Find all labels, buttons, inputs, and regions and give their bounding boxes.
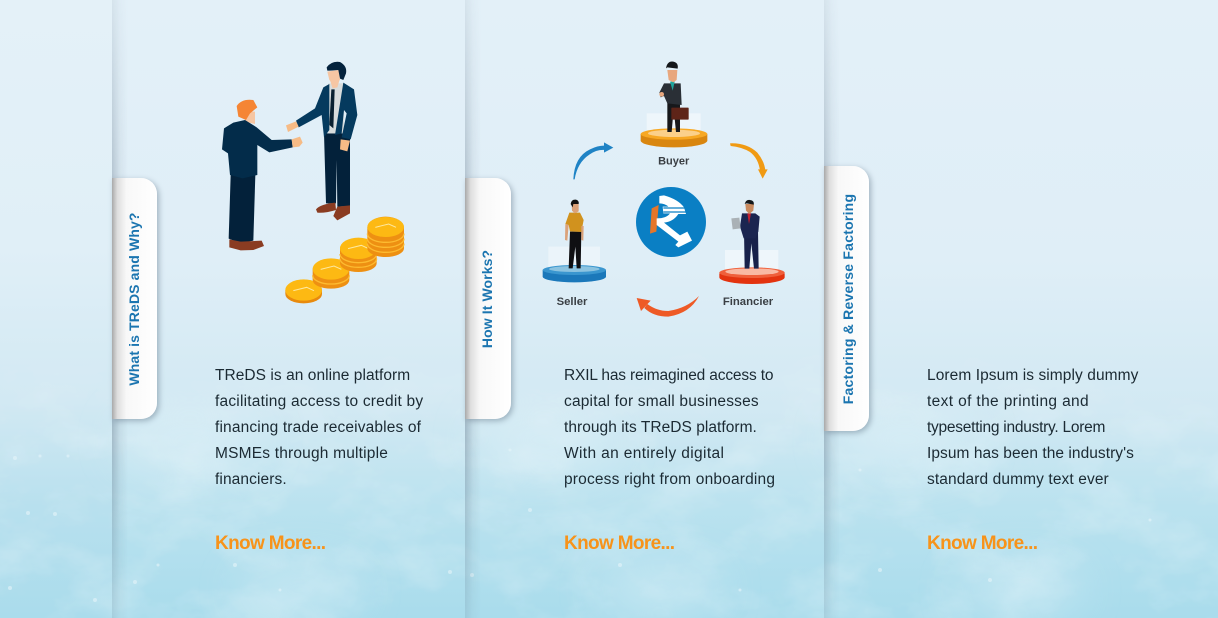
text: card one body: MSMEs through multiple [215,445,388,462]
link: card three know more: Know More... [927,533,1037,554]
icon: financier on red platform [719,200,785,284]
text: card two body [564,367,775,488]
link: card one know more: Know More... [215,533,325,554]
icon: buyer on orange platform [641,62,707,147]
panel: second card [465,0,824,618]
label: Buyer: Buyer [658,156,690,168]
tab: Factoring & Reverse Factoring [824,166,869,431]
text: card one body: facilitating access to credit by [215,393,423,410]
icon: man with dark hair [286,62,357,220]
text: card three body: Lorem Ipsum is simply dummy [927,367,1138,384]
text: card one body: TReDS is an online platform [215,367,410,384]
tab: Factoring & Reverse Factoring: Factoring & Reverse Factoring [840,193,856,404]
tab: How It Works?: How It Works? [479,249,495,348]
icon: rupee logo [636,187,706,257]
text: card two body: capital for small businesses [564,393,759,410]
text: card one body [215,367,424,488]
label: Seller: Seller [557,296,588,308]
text: card two body: With an entirely digital [564,445,724,462]
text: card three body [927,367,1138,488]
link: card two know more: Know More... [564,533,674,554]
label: Financier: Financier [723,296,774,308]
text: card three body: typesetting industry. Lorem [927,419,1105,436]
text: card three body: Ipsum has been the industry's [927,445,1134,462]
icon: seller on blue platform [543,200,606,282]
arrow: financier to seller [637,296,699,317]
tab: What is TReDS and Why?: What is TReDS and Why? [126,212,142,385]
text: card one body: financiers. [215,471,287,488]
arrow: buyer to financier [730,143,768,179]
icon: man with orange hair [222,100,303,250]
panel: first card [112,0,465,618]
text: card three body: standard dummy text ever [927,471,1109,488]
text: card two body: RXIL has reimagined access to [564,367,773,384]
tab: How It Works? [465,178,511,419]
illustration: handshake and coins [222,62,405,304]
tab: What is TReDS and Why? [112,178,157,419]
icon: coin stacks [285,217,404,303]
text: card three body: text of the printing and [927,393,1089,410]
arrow: seller to buyer [573,142,613,179]
diagram: TReDS flow [542,62,785,317]
text: card two body: process right from onboarding [564,471,775,488]
text: card one body: financing trade receivables of [215,419,421,436]
panel: third card [824,0,1218,618]
text: card two body: through its TReDS platform. [564,419,757,436]
